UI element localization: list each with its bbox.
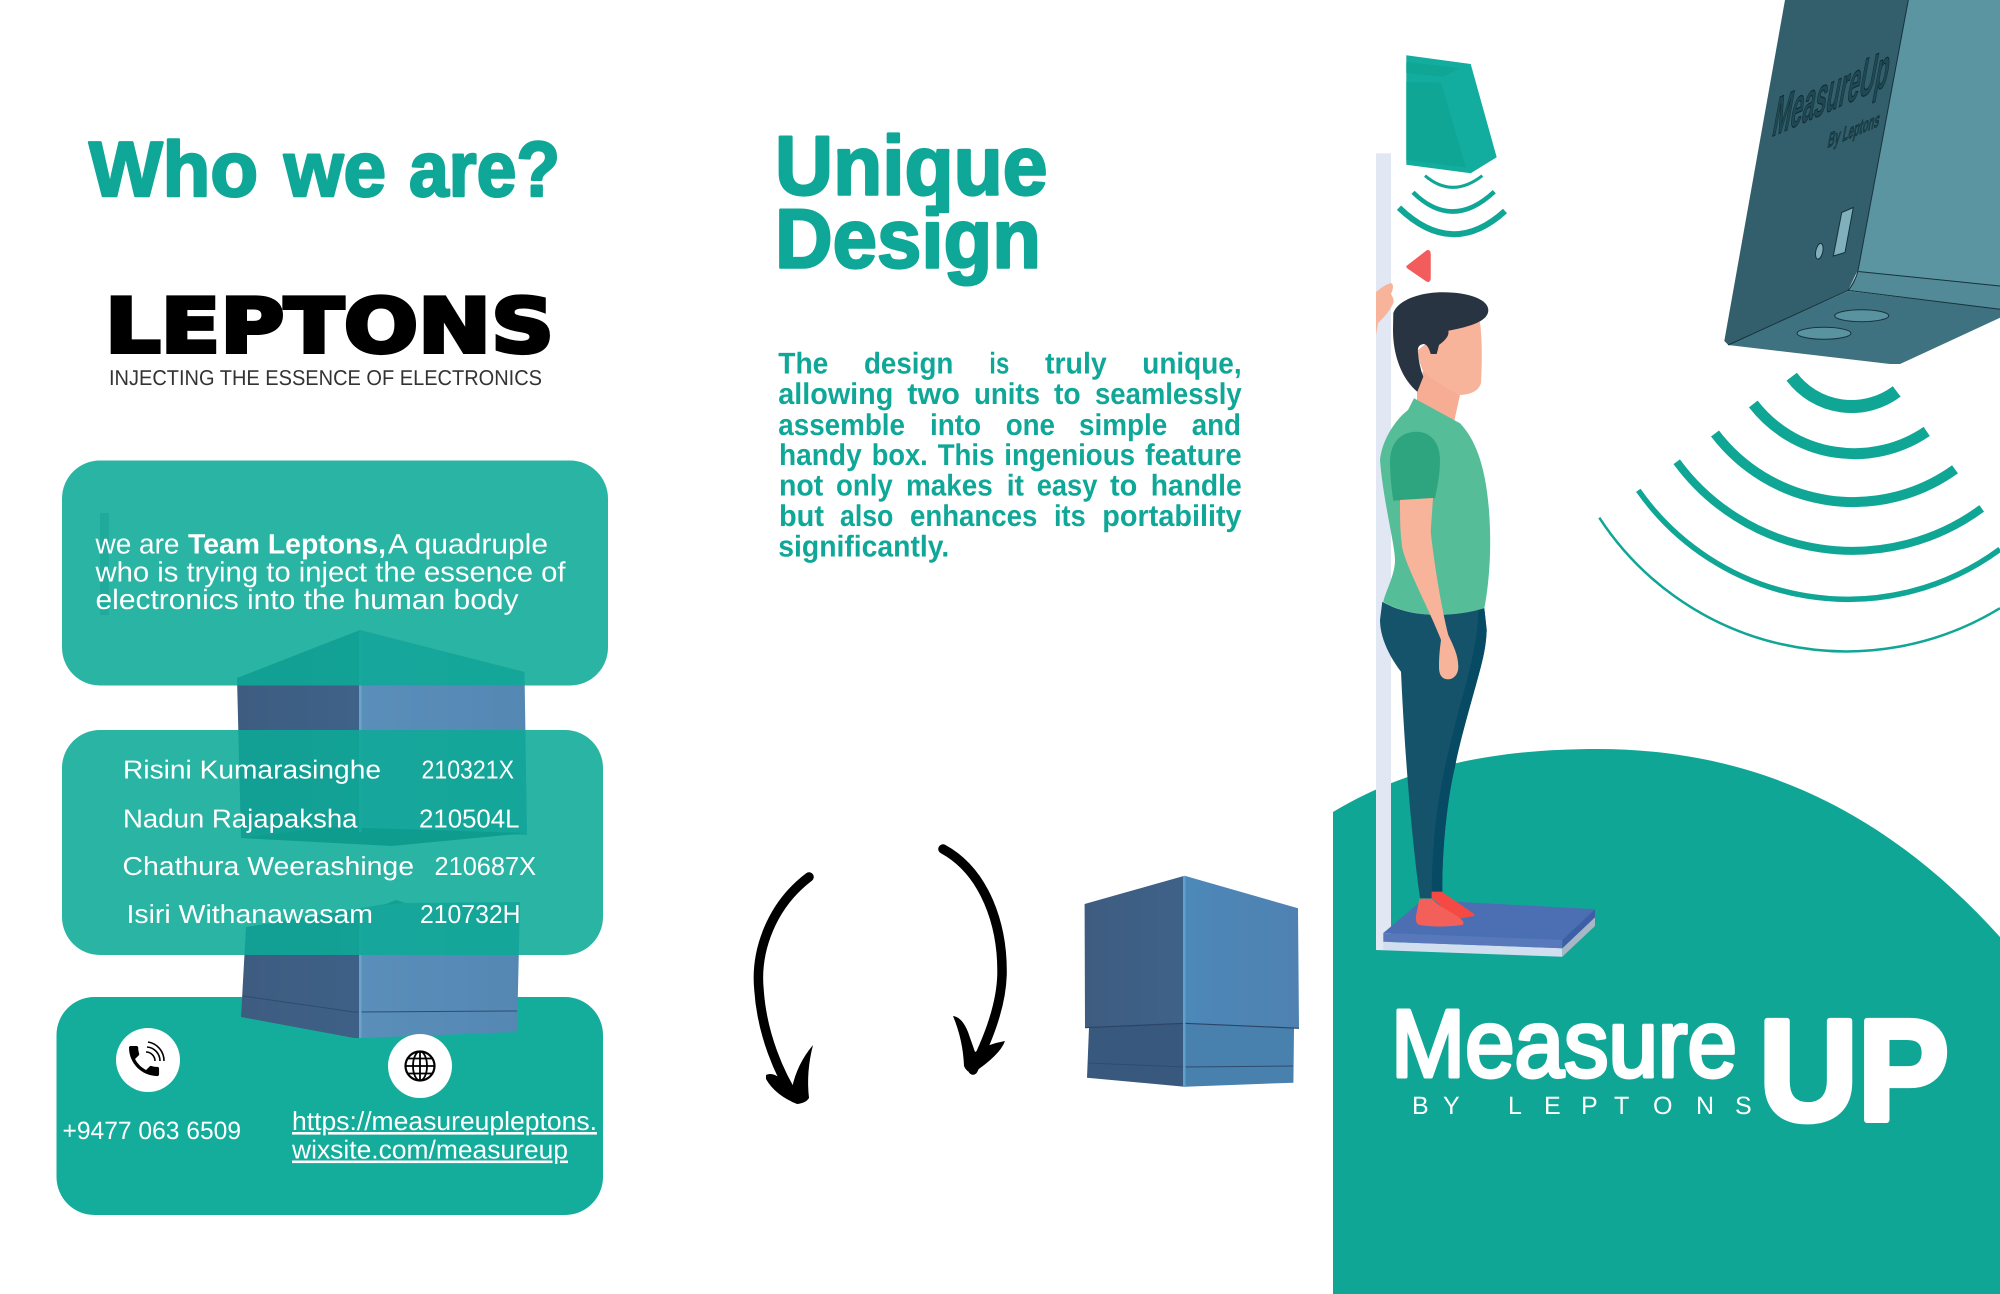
device: top right enclosure <box>1724 0 2000 364</box>
logo: Measure UP by Leptons: Measure <box>1391 990 1737 1098</box>
logo: Measure UP by Leptons: P <box>1581 1092 1598 1120</box>
panel: team members: Nadun Rajapaksha <box>123 804 358 834</box>
height pole <box>1376 153 1391 950</box>
paragraph: design description: into <box>930 409 981 442</box>
logo: Leptons <box>105 282 554 390</box>
logo: Measure UP by Leptons: Y <box>1443 1092 1460 1120</box>
paragraph: design description: to <box>1110 470 1137 503</box>
paragraph: design description <box>778 347 1242 564</box>
background hill <box>1333 749 2000 1294</box>
paragraph: design description: is <box>989 347 1009 380</box>
illustration: person on scale <box>1376 283 1595 957</box>
paragraph: design description: two <box>907 378 960 411</box>
heading: Unique Design <box>775 118 1048 286</box>
paragraph: design description: The <box>778 347 828 380</box>
icon: phone <box>116 1028 180 1092</box>
scale <box>1376 902 1595 957</box>
paragraph: design description: box. <box>872 439 928 472</box>
logo: Leptons: LEPTONS <box>105 282 554 370</box>
title: Who we are?: are? <box>409 125 560 213</box>
paragraph: design description: portability <box>1102 500 1242 533</box>
panel: about text: A quadruple <box>388 528 548 560</box>
title: Who we are? <box>89 125 560 213</box>
pants <box>1380 602 1487 898</box>
panel: team members: 210687X <box>434 851 536 881</box>
panel: about text <box>62 460 608 686</box>
paragraph: design description: truly <box>1045 347 1107 380</box>
logo: Measure UP by Leptons: L <box>1508 1092 1522 1120</box>
heading: Unique Design: Unique <box>775 118 1048 212</box>
shoes <box>1432 892 1475 919</box>
photo: separated box units <box>237 630 527 1038</box>
panel: about text: Team Leptons, <box>188 528 386 560</box>
paragraph: design description: easy <box>1037 470 1098 503</box>
paragraph: design description: significantly. <box>778 531 949 564</box>
icon: globe <box>388 1034 452 1098</box>
panel: team members: 210321X <box>422 754 514 784</box>
paragraph: design description: makes <box>906 470 993 503</box>
logo: Leptons: INJECTING THE ESSENCE OF ELECTRONICS <box>109 366 542 390</box>
paragraph: design description: one <box>1006 409 1055 442</box>
panel: team members <box>62 730 603 955</box>
contact phone number: +9477 063 6509 <box>62 1117 241 1145</box>
paragraph: design description: only <box>836 470 893 503</box>
arrow: left curved <box>758 877 813 1104</box>
pants shadow <box>1432 608 1487 892</box>
face <box>1418 322 1482 395</box>
raised hand <box>1376 283 1394 335</box>
heading: Unique Design: Design <box>775 192 1041 286</box>
paragraph: design description: but <box>779 500 824 533</box>
paragraph: design description: assemble <box>778 409 905 442</box>
panel: team members: 210732H <box>420 899 520 929</box>
paragraph: design description: design <box>864 347 953 380</box>
title: Who we are?: Who <box>89 125 258 213</box>
photo: assembled box <box>1085 876 1299 1087</box>
paragraph: design description: unique, <box>1142 347 1242 380</box>
paragraph: design description: it <box>1007 470 1024 503</box>
sleeve <box>1390 432 1440 501</box>
panel: team members: 210504L <box>419 804 520 834</box>
paragraph: design description: seamlessly <box>1095 378 1242 411</box>
shirt <box>1380 398 1490 615</box>
paragraph: design description: This <box>938 439 994 472</box>
paragraph: design description: ingenious <box>1004 439 1135 472</box>
contact website link: https://measureupleptons. <box>292 1106 597 1136</box>
contact website link: wixsite.com/measureup <box>291 1134 568 1164</box>
paragraph: design description: and <box>1192 409 1241 442</box>
sound waves: small <box>1399 176 1505 234</box>
logo: Measure UP by Leptons: E <box>1544 1092 1561 1120</box>
logo: Measure UP by Leptons: O <box>1653 1092 1672 1120</box>
paragraph: design description: handle <box>1151 470 1242 503</box>
arrow: right curved <box>943 849 1005 1073</box>
panel: about text: electronics into the human body <box>96 584 518 615</box>
sound waves: large <box>1599 377 2000 651</box>
panel: about text: we are <box>95 528 180 560</box>
paragraph: design description: to <box>1054 378 1081 411</box>
contact website link <box>291 1106 597 1164</box>
logo: Measure UP by Leptons: UP <box>1759 990 1949 1151</box>
logo: Measure UP by Leptons: S <box>1735 1092 1752 1120</box>
paragraph: design description: simple <box>1079 409 1167 442</box>
logo: Measure UP by Leptons: B <box>1412 1092 1429 1120</box>
paragraph: design description: not <box>779 470 823 503</box>
device: ceiling sensor <box>1406 55 1497 173</box>
paragraph: design description: units <box>974 378 1040 411</box>
title: Who we are?: we <box>283 125 386 213</box>
panel: team members: Isiri Withanawasam <box>126 899 373 929</box>
panel: about text: who is trying to inject the essence of <box>94 556 566 588</box>
logo: Measure UP by Leptons: N <box>1696 1092 1714 1120</box>
paragraph: design description: feature <box>1145 439 1242 472</box>
logo: Measure UP by Leptons <box>1391 990 1949 1151</box>
panel: team members: Risini Kumarasinghe <box>123 754 381 784</box>
panel: contact <box>56 997 603 1215</box>
panel: team members: Chathura Weerashinge <box>122 851 414 881</box>
paragraph: design description: handy <box>779 439 862 472</box>
paragraph: design description: its <box>1054 500 1086 533</box>
neck <box>1417 371 1460 422</box>
hair <box>1393 292 1488 392</box>
device: top right enclosure: By Leptons <box>1826 106 1882 153</box>
logo: Measure UP by Leptons: T <box>1614 1092 1629 1120</box>
marker: red triangle <box>1407 251 1430 281</box>
paragraph: design description: also <box>840 500 893 533</box>
paragraph: design description: allowing <box>778 378 893 411</box>
paragraph: design description: enhances <box>910 500 1037 533</box>
arm <box>1400 498 1458 679</box>
